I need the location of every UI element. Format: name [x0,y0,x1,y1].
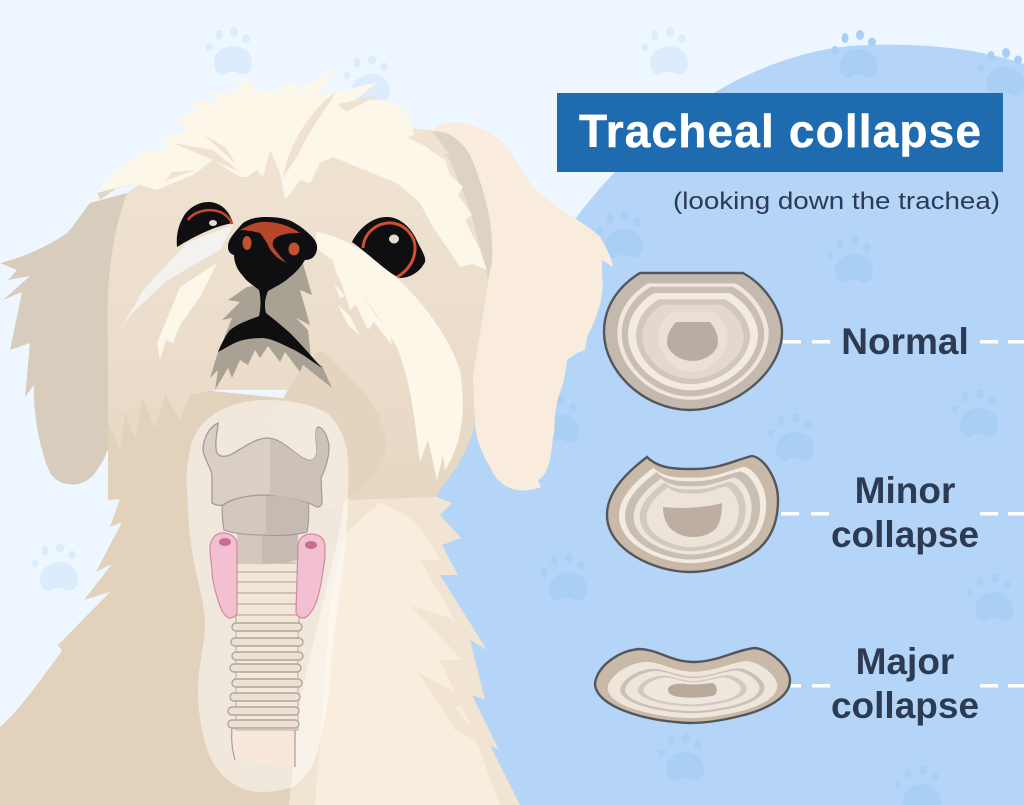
chest fur tuft [417,672,485,745]
head top hair [85,70,487,270]
major collapse trachea cross-section [595,648,790,723]
thyroid cartilage [203,423,329,507]
left ear [0,193,127,485]
nose colouring [240,222,300,263]
upper tracheal rings [236,563,299,624]
left gland hole [219,538,231,546]
label: minor collapse: collapse [831,514,979,555]
ear shadow band [427,131,492,280]
right eye [352,217,425,278]
title banner [557,93,1003,172]
right eye highlight [389,234,399,244]
left eye iris [188,210,232,224]
fur under nose [222,260,312,368]
paw prints on light background [32,27,688,591]
left eye [177,202,233,247]
ear-side grey wisp [97,183,135,200]
subtitle: (looking down the trachea) [673,188,1000,215]
body side fur [289,495,520,805]
fur under mouth [210,336,332,390]
nose and mouth [218,217,322,368]
left muzzle white streak [113,225,233,347]
right eye iris [363,223,415,277]
chin shadow patch [270,350,386,510]
dog illustration [0,70,613,805]
cricoid shade [266,490,308,535]
minor collapse trachea cross-section [607,456,778,572]
lower trachea [232,728,295,767]
title text: Tracheal collapse [579,105,981,157]
hair strokes [165,92,450,181]
cricoid cartilage [222,490,309,536]
normal trachea cross-section [604,273,782,410]
lower larynx [237,528,298,564]
label: major collapse: Major [856,641,954,682]
right muzzle cream [316,232,463,480]
neck and body [0,380,520,805]
left pink gland [210,533,237,618]
head base [108,120,490,500]
label: normal: Normal [841,321,969,362]
tracheal spine [236,624,298,730]
tracheal rings [228,623,303,728]
label: minor collapse: Minor [855,470,955,511]
right gland hole [305,541,317,549]
anatomy overlay [186,400,348,792]
right nostril [288,242,300,256]
thyroid shade [270,428,328,506]
right ear [431,123,613,491]
trachea walls [232,728,295,767]
chest fur [315,503,500,805]
label: major collapse: collapse [831,685,979,726]
dashed connector lines [781,340,1024,688]
left nostril [242,236,252,250]
right muzzle fur strands [332,258,392,345]
paw prints on blue panel [532,30,1024,805]
lower larynx shade [262,528,298,564]
left muzzle cream [157,263,217,360]
blue curved panel [400,45,1024,805]
right pink gland [296,534,325,618]
left muzzle second white streak [125,249,222,320]
left eye highlight [209,220,217,226]
